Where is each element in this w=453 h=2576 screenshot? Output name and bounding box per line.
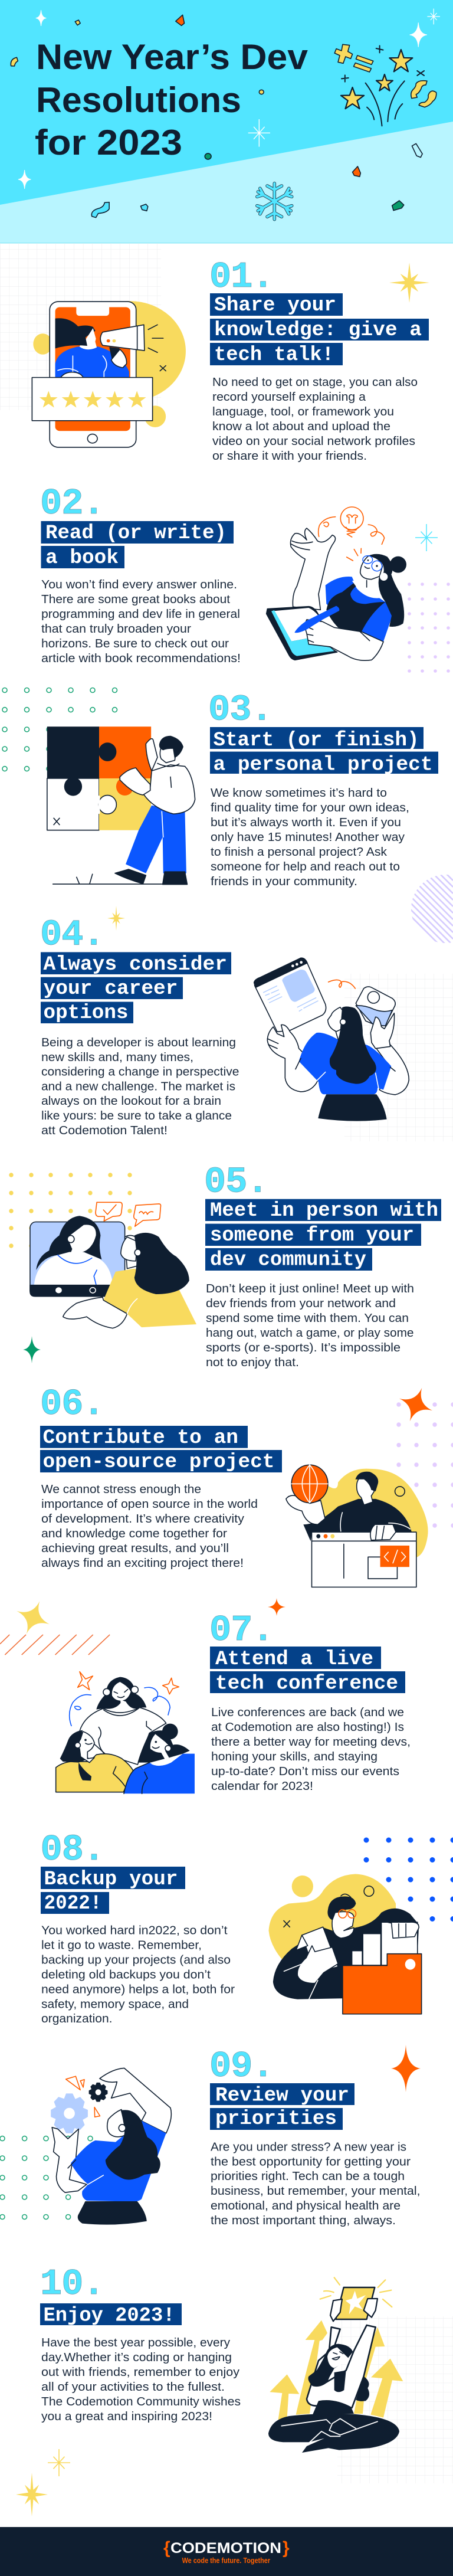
text block 04: new skills and, many times, <box>41 1051 193 1064</box>
number 06: 06. <box>40 1383 104 1425</box>
text block 02: programming and dev life in general <box>41 608 240 621</box>
text block 07 <box>211 1706 411 1793</box>
heading 03: a personal project <box>214 754 433 777</box>
text block 06: and knowledge come together for <box>41 1527 227 1540</box>
text block 04: att Codemotion Talent! <box>41 1124 168 1137</box>
icon: green sparkle <box>23 1336 41 1363</box>
icon: yellow sparkles <box>16 2449 70 2516</box>
tagline: We code the future. Together <box>182 2557 270 2565</box>
icon: orange sparkle <box>393 1382 438 1427</box>
text block 05: hang out, watch a game, or play some <box>206 1327 414 1340</box>
illustration: developer with orange globe and code window <box>286 1465 428 1587</box>
text block 08 <box>41 1924 235 2025</box>
text block 03: to finish a personal project? Ask <box>211 846 388 859</box>
panel: 07 attend a live tech conference <box>0 1595 411 1793</box>
illustration: woman holding window and image card <box>254 958 409 1121</box>
logo: codemotion <box>163 2538 290 2558</box>
illustration: man assembling puzzle <box>47 726 195 885</box>
heading 07: tech conference <box>215 1673 398 1695</box>
text block 05: spend some time with them. You can <box>206 1312 409 1325</box>
heading 09: Review your <box>215 2085 349 2107</box>
text block 01: language, tool, or framework you <box>212 405 394 418</box>
panel: 03 start or finish a personal project <box>2 688 438 888</box>
illustration: video call between two women <box>30 1202 196 1328</box>
number 01: 01. <box>209 256 274 298</box>
dots: blue <box>363 1838 453 1922</box>
text block 10: Have the best year possible, every <box>41 2336 230 2349</box>
text block 01 <box>212 376 418 463</box>
number 05: 05. <box>204 1161 268 1203</box>
footer <box>0 2527 453 2576</box>
logo: codemotion: } <box>283 2538 290 2558</box>
text block 05: sports (or e-sports). It’s impossible <box>206 1341 401 1354</box>
text block 04: Being a developer is about learning <box>41 1036 236 1049</box>
number 03: 03. <box>208 689 273 731</box>
heading 04: your career <box>44 978 178 1000</box>
panel: 08 backup your 2022 <box>40 1829 453 2025</box>
title: for 2023 <box>35 123 182 162</box>
heading 09: priorities <box>215 2108 337 2130</box>
icon: fireworks of stars and symbols <box>334 44 436 126</box>
text block 02 <box>41 578 241 665</box>
text block 09 <box>211 2141 420 2227</box>
heading 04: options <box>44 1002 129 1024</box>
text block 10: out with friends, remember to enjoy <box>41 2366 239 2379</box>
text block 02: that can truly broaden your <box>41 623 191 636</box>
heading 05: Meet in person with <box>210 1200 438 1222</box>
heading 06: open-source project <box>42 1451 275 1474</box>
text block 10: day.Whether it’s coding or hanging <box>41 2351 232 2364</box>
text block 01: or share it with your friends. <box>212 450 367 463</box>
text block 03: find quality time for your own ideas, <box>211 801 409 814</box>
illustration: three women <box>56 1672 195 1793</box>
heading 03 <box>210 727 438 777</box>
number 07: 07. <box>209 1609 274 1651</box>
text block 05: not to enjoy that. <box>206 1356 299 1369</box>
heading 06: Contribute to an <box>42 1427 238 1449</box>
text block 08: backing up your projects (and also <box>41 1954 231 1967</box>
text block 08: let it go to waste. Remember, <box>41 1939 202 1952</box>
pattern: purple hatched circle <box>411 875 453 943</box>
background grid <box>0 243 161 410</box>
text block 05: Don’t keep it just online! Meet up with <box>206 1282 414 1295</box>
icon: cyan sparkle <box>415 524 438 551</box>
heading 02 <box>41 521 234 569</box>
panel: 09 review your priorities <box>0 2045 421 2227</box>
text block 08: organization. <box>41 2012 112 2025</box>
logo: codemotion: CODEMOTION <box>170 2540 281 2557</box>
text block 10: The Codemotion Community wishes <box>41 2395 241 2408</box>
illustration: man filing documents into folder <box>269 1874 422 2014</box>
text block 09: Are you under stress? A new year is <box>211 2141 406 2154</box>
text block 01: know a lot about and upload the <box>212 420 390 433</box>
text block 07: up-to-date? Don’t miss our events <box>211 1765 399 1778</box>
number 09: 09. <box>209 2045 274 2087</box>
decoration: orange diagonal stripes <box>0 1635 110 1655</box>
icon: yellow sparkle <box>389 263 429 303</box>
text block 08: safety, memory space, and <box>41 1998 189 2011</box>
text block 04: considering a change in perspective <box>41 1066 239 1079</box>
heading 02: Read (or write) <box>45 522 226 545</box>
text block 06: importance of open source in the world <box>41 1498 258 1511</box>
text block 10: all of your activities to the fullest. <box>41 2381 225 2394</box>
heading 05: dev community <box>210 1249 366 1271</box>
icon: hero sparkles <box>18 9 440 189</box>
text block 10: you a great and inspiring 2023! <box>41 2410 212 2423</box>
text block 09: the best opportunity for getting your <box>211 2155 411 2168</box>
title: New Year’s Dev <box>36 37 308 77</box>
heading 01: tech talk! <box>214 344 334 366</box>
text block 02: horizons. Be sure to check out our <box>41 637 229 650</box>
panel: 06 contribute to an open-source project <box>40 1382 453 1587</box>
text block 09: the most important thing, always. <box>211 2214 396 2227</box>
heading 01 <box>210 293 429 366</box>
text block 04 <box>41 1036 239 1137</box>
text block 01: No need to get on stage, you can also <box>212 376 418 389</box>
text block 03: We know sometimes it’s hard to <box>211 787 387 800</box>
text block 06: of development. It’s where creativity <box>41 1513 244 1526</box>
text block 06: achieving great results, and you’ll <box>41 1542 229 1555</box>
text block 01: video on your social network profiles <box>212 435 415 448</box>
title: Resolutions <box>36 80 241 120</box>
text block 07: there a better way for meeting devs, <box>211 1736 411 1749</box>
number 02: 02. <box>40 483 104 525</box>
icon: yellow sparkle <box>107 906 125 931</box>
text block 02: article with book recommendations! <box>41 652 241 665</box>
text block 02: There are some great books about <box>41 593 230 606</box>
number 08: 08. <box>40 1829 104 1871</box>
text block 09: emotional, and physical health are <box>211 2199 401 2212</box>
text block 04: like yours: be sure to take a glance <box>41 1109 232 1122</box>
text block 08: You worked hard in2022, so don’t <box>41 1924 228 1937</box>
heading 09 <box>210 2083 354 2130</box>
panel: hero header <box>0 0 453 243</box>
text block 02: You won’t find every answer online. <box>41 578 237 591</box>
text block 08: deleting old backups you don’t <box>41 1969 211 1982</box>
text block 06 <box>41 1483 258 1570</box>
heading 08 <box>41 1867 185 1915</box>
text block 10 <box>41 2336 241 2423</box>
panel: 10 enjoy 2023 <box>16 2263 453 2516</box>
heading 10: Enjoy 2023! <box>44 2305 175 2328</box>
text block 07: Live conferences are back (and we <box>211 1706 404 1719</box>
illustration: phone with megaphone and star rating <box>32 301 186 447</box>
illustration: woman holding star card with arrows <box>268 2277 403 2453</box>
text block 03: friends in your community. <box>211 875 357 888</box>
panel: 05 meet in person <box>9 1161 441 1369</box>
background grid <box>337 2316 453 2483</box>
number 04: 04. <box>40 914 104 956</box>
dots: purple <box>396 1402 453 1528</box>
text block 03: only have 15 minutes! Another way <box>211 831 405 844</box>
text block 06: We cannot stress enough the <box>41 1483 201 1496</box>
text block 07: at Codemotion are also hosting!) Is <box>211 1721 404 1734</box>
heading 02: a book <box>45 547 119 569</box>
heading 05: someone from your <box>210 1225 414 1247</box>
heading 04: Always consider <box>44 954 227 976</box>
title <box>35 37 308 162</box>
text block 09: business, but remember, your mental, <box>211 2185 420 2198</box>
text block 07: honing your skills, and staying <box>211 1750 378 1763</box>
text block 09: priorities right. Tech can be a tough <box>211 2170 405 2183</box>
panel: 01 share your knowledge <box>0 243 429 463</box>
text block 05 <box>206 1282 414 1369</box>
text block 03 <box>211 787 409 888</box>
heading 01: Share your <box>214 294 336 317</box>
dots: purple <box>408 582 450 673</box>
heading 06 <box>40 1426 282 1474</box>
icon: snowflake <box>257 184 292 220</box>
logo: codemotion: { <box>163 2538 170 2558</box>
text block 08: need anymore) helps a lot, both for <box>41 1983 235 1996</box>
dots: yellow <box>9 1173 132 1248</box>
text block 03: someone for help and reach out to <box>211 860 400 873</box>
text block 07: calendar for 2023! <box>211 1780 313 1793</box>
icon: confetti <box>11 15 422 218</box>
heading 08: Backup your <box>44 1868 178 1891</box>
heading 07: Attend a live <box>215 1648 373 1671</box>
text block 01: record yourself explaining a <box>212 391 366 404</box>
text block 06: always find an exciting project there! <box>41 1557 244 1570</box>
heading 05 <box>205 1199 441 1271</box>
background grid <box>344 974 453 1141</box>
icon: yellow and orange sparkles <box>10 1595 285 1641</box>
text block 05: dev friends from your network and <box>206 1297 396 1310</box>
dots: green rings <box>0 2136 93 2219</box>
dots: green rings <box>2 688 117 771</box>
heading 03: Start (or finish) <box>214 729 419 752</box>
hero background <box>0 0 453 243</box>
panel: 02 read or write a book <box>40 483 450 673</box>
text block 03: but it’s always worth it. Even if you <box>211 816 401 829</box>
text block 04: and a new challenge. The market is <box>41 1080 235 1093</box>
illustration: woman with tablet and idea bulb <box>267 507 406 660</box>
number 10: 10. <box>40 2263 104 2305</box>
heading 01: knowledge: give a <box>214 319 422 342</box>
heading 07 <box>210 1647 405 1695</box>
heading 04 <box>41 952 231 1024</box>
icon: orange sparkle <box>391 2045 421 2092</box>
text block 04: always on the lookout for a brain <box>41 1095 221 1108</box>
panel: 04 always consider your career options <box>41 875 453 1141</box>
heading 08: 2022! <box>44 1893 101 1915</box>
illustration: woman with gears <box>51 2068 171 2225</box>
